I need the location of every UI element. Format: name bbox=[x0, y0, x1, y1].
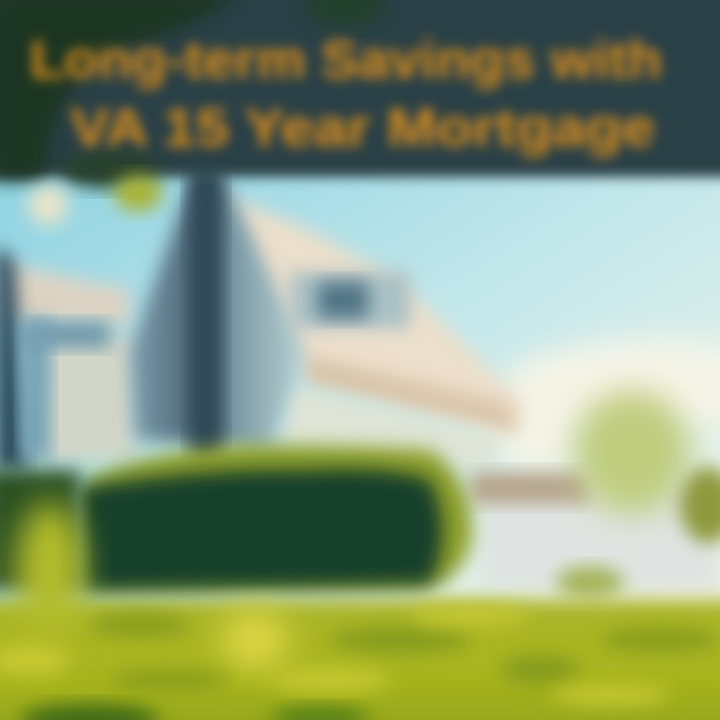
post: dark central post bbox=[190, 170, 222, 460]
window: left wall bbox=[30, 322, 110, 348]
shrub: left dark hedge bbox=[0, 470, 80, 590]
cloud: low white haze bbox=[490, 365, 590, 475]
window: dormer dark bbox=[318, 282, 368, 318]
shrub: yellow foreground plant bbox=[16, 502, 84, 638]
roof: tan fascia band bbox=[305, 355, 515, 432]
house bbox=[0, 170, 720, 590]
wall: left blue edge bbox=[22, 320, 50, 460]
gable: central blue gable bbox=[130, 170, 305, 450]
roof: main cream roof bbox=[225, 195, 525, 435]
post: left dark post bbox=[0, 245, 28, 470]
shrub: small distant shrub bbox=[556, 566, 624, 598]
foliage: hanging leaf yellow bbox=[114, 175, 162, 211]
wall: left white wall bbox=[40, 335, 135, 460]
title banner bbox=[0, 0, 720, 177]
foliage: hanging leaf light bbox=[28, 185, 68, 225]
cloud: right white cloud bbox=[520, 340, 720, 430]
grass shadow bbox=[20, 704, 160, 720]
roof: left cream roof bbox=[0, 262, 130, 325]
tree: right dark shrub bbox=[680, 467, 720, 543]
wall: central light wall bbox=[285, 385, 500, 470]
title bbox=[30, 30, 662, 158]
grass highlight bbox=[221, 610, 289, 670]
hedge bbox=[80, 445, 472, 592]
grass mottling: mid dark patches bbox=[90, 613, 720, 690]
window: dormer frame bbox=[290, 272, 410, 328]
foliage: top-left tree bbox=[0, 0, 240, 180]
title line 2: VA 15 Year Mortgage bbox=[70, 98, 655, 158]
sky background bbox=[0, 170, 720, 620]
grass bbox=[0, 600, 720, 720]
wall: low right building bbox=[480, 490, 720, 590]
grass mottling: bright patches bbox=[0, 605, 670, 705]
foliage: top centre leaves bbox=[305, 0, 385, 26]
tree: right pale tree bbox=[574, 390, 690, 514]
grass shadow right bbox=[270, 706, 370, 720]
hedge: dark body bbox=[80, 469, 442, 590]
roof: low right band bbox=[470, 472, 590, 504]
title line 1: Long-term Savings with bbox=[30, 30, 662, 90]
hedge: bright edge bbox=[85, 445, 472, 592]
foliage: lower-left clump bbox=[60, 152, 160, 188]
